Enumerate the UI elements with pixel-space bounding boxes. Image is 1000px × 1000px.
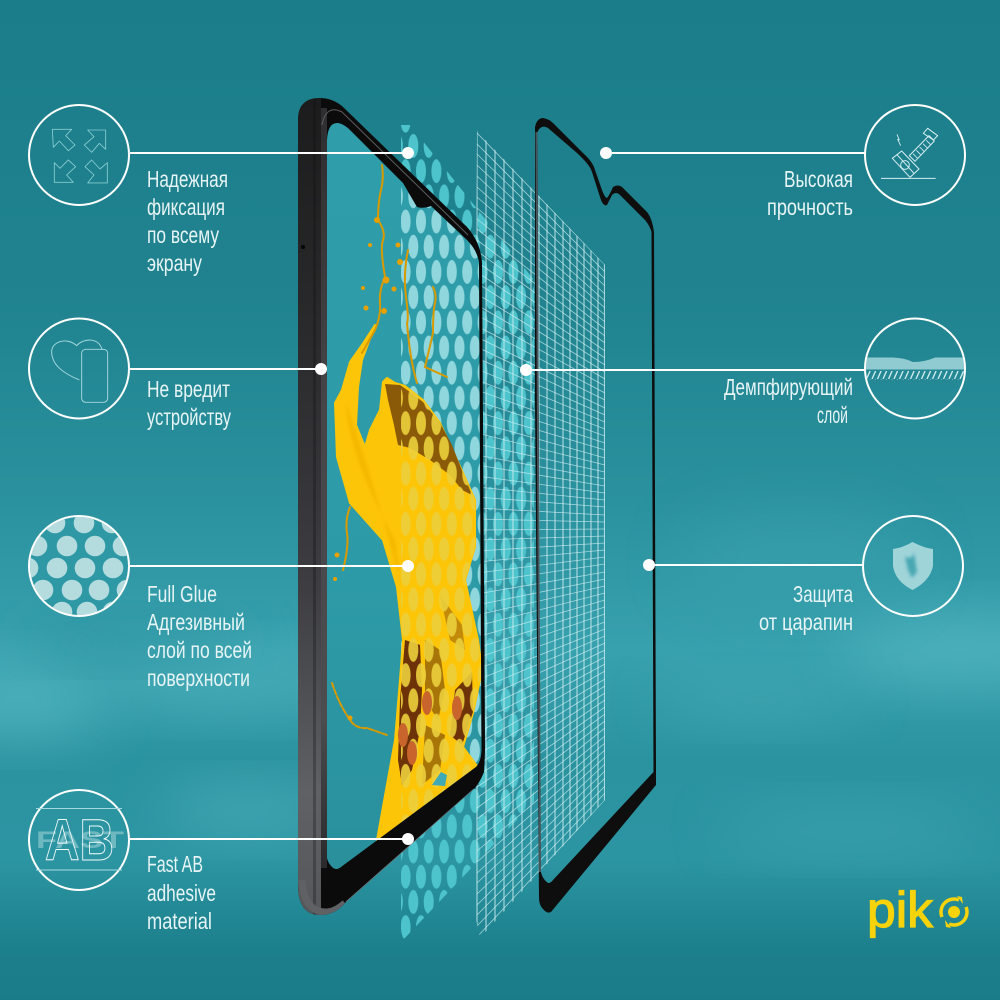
text: full glue: Адгезивный	[147, 609, 245, 635]
text: harmless to device	[147, 376, 231, 430]
phone frame	[298, 98, 485, 915]
text: full glue	[147, 581, 252, 691]
text: scratch protection: Защита	[793, 581, 853, 607]
phone screen	[298, 98, 485, 915]
phone side strip	[298, 98, 474, 915]
text: damping layer: Демпфирующий	[724, 374, 853, 400]
text: damping layer: слой	[817, 402, 848, 428]
layer: adhesive oval dots	[401, 125, 534, 940]
text: full glue: поверхности	[147, 665, 250, 691]
text: fast AB adhesive material: adhesive	[147, 880, 216, 906]
text: harmless to device: устройству	[147, 404, 231, 430]
text: damping layer	[724, 374, 853, 428]
text: reliable fixation: по всему	[147, 222, 219, 248]
text: reliable fixation: экрану	[147, 250, 202, 276]
text: full glue: Full Glue	[147, 581, 217, 607]
icon: damping layer	[860, 318, 970, 418]
layer: damping mesh	[477, 120, 605, 950]
icon: scratch shield	[863, 516, 963, 616]
text: harmless to device: Не вредит	[147, 376, 230, 402]
text: scratch protection	[759, 581, 853, 635]
text: high strength: прочность	[767, 194, 853, 220]
logo: piko: pik	[867, 882, 934, 938]
text: fast AB adhesive material: Fast AB	[147, 851, 203, 877]
icon: heart and phone	[29, 318, 129, 418]
logo: piko	[867, 882, 967, 938]
text: fast AB adhesive material: material	[147, 908, 212, 934]
text: reliable fixation	[147, 166, 228, 276]
screen ovals	[401, 186, 482, 762]
text: high strength: Высокая	[784, 166, 853, 192]
phone	[298, 98, 485, 915]
text: scratch protection: от царапин	[759, 609, 853, 635]
icon: fast AB adhesive: FAST	[36, 827, 124, 854]
icon: fast AB adhesive: AB	[45, 808, 114, 873]
layer: glass with black frame	[535, 118, 656, 913]
text: reliable fixation: Надежная	[147, 166, 228, 192]
icon: fast AB adhesive	[29, 790, 129, 890]
leader lines and dots	[130, 147, 865, 845]
icon: adhesive dots	[28, 515, 130, 617]
icon: hammer	[865, 105, 965, 205]
text: reliable fixation: фиксация	[147, 194, 225, 220]
text: fast AB adhesive material	[147, 851, 216, 934]
text: high strength	[767, 166, 853, 220]
icon: four expanding arrows	[29, 105, 129, 205]
text: full glue: слой по всей	[147, 637, 252, 663]
yellow splash	[332, 165, 482, 840]
